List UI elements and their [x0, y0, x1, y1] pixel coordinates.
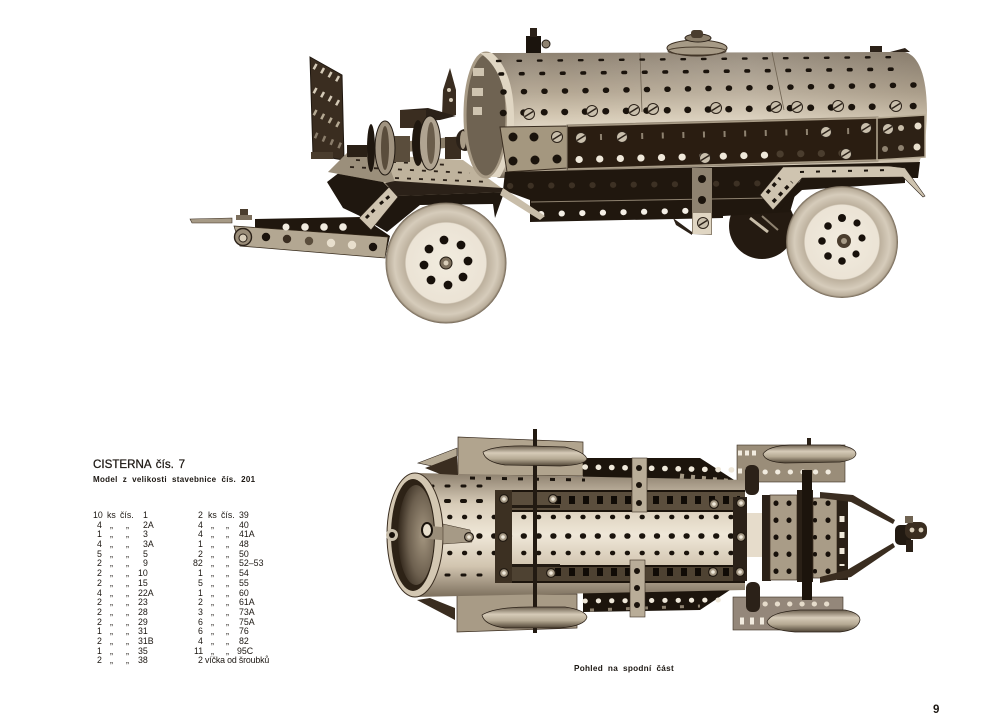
- left column of parts: 22A: [138, 588, 154, 598]
- illustration: underside view of trailer: [386, 429, 927, 633]
- left column of parts: „: [110, 578, 113, 588]
- left column of parts: 1: [97, 646, 102, 656]
- left column of parts: 1: [97, 529, 102, 539]
- left column of parts: 4: [97, 588, 102, 598]
- right column of parts: „: [211, 520, 214, 530]
- right column of parts: „: [211, 646, 214, 656]
- right column of parts: 54: [239, 568, 249, 578]
- left column of parts: „: [126, 568, 129, 578]
- left column of parts: 29: [138, 617, 148, 627]
- right column of parts: „: [211, 529, 214, 539]
- tank body with ring end: [465, 52, 927, 178]
- right column of parts: „: [211, 617, 214, 627]
- right column of parts: „: [211, 539, 214, 549]
- front axle: [512, 429, 560, 633]
- right end plate: [877, 115, 925, 160]
- right column of parts: 2: [198, 510, 203, 520]
- left column of parts: 1: [143, 510, 148, 520]
- winch pulleys: [367, 116, 474, 175]
- left column of parts: 2: [97, 617, 102, 627]
- winch axle: [347, 135, 474, 162]
- left column of parts: 28: [138, 607, 148, 617]
- left column of parts: 4: [97, 539, 102, 549]
- tan straps: [630, 458, 647, 617]
- right column of parts: „: [226, 578, 229, 588]
- right column of parts: ks: [208, 510, 217, 520]
- right corner bracket: [760, 166, 925, 210]
- left column of parts: „: [110, 617, 113, 627]
- left column of parts: „: [126, 539, 129, 549]
- left column of parts: 1: [97, 626, 102, 636]
- right column of parts: 2 víčka od šroubků: [198, 655, 269, 665]
- vertical strap: [673, 168, 712, 235]
- right column of parts: 82: [193, 558, 203, 568]
- left column of parts: ks: [107, 510, 116, 520]
- left column of parts: „: [126, 597, 129, 607]
- left column of parts: „: [126, 549, 129, 559]
- left column of parts: 10: [93, 510, 103, 520]
- left column of parts: čís.: [120, 510, 134, 520]
- right column of parts: „: [226, 558, 229, 568]
- right column of parts: 52–53: [239, 558, 264, 568]
- right column of parts: „: [211, 558, 214, 568]
- right column of parts: „: [211, 549, 214, 559]
- right column of parts: 4: [198, 529, 203, 539]
- rear wheel behind chassis: [729, 193, 795, 259]
- side frame beams: [583, 458, 745, 612]
- right column of parts: 48: [239, 539, 249, 549]
- right column of parts: 39: [239, 510, 249, 520]
- right column of parts: 61A: [239, 597, 255, 607]
- left column of parts: 2: [97, 636, 102, 646]
- left column of parts: 2: [97, 558, 102, 568]
- left column of parts: „: [126, 646, 129, 656]
- left column of parts: 2: [97, 607, 102, 617]
- right column of parts: [193, 510, 269, 665]
- left column of parts: „: [126, 588, 129, 598]
- caption: underside view: Pohled na spodní část: [574, 664, 674, 673]
- left column of parts: „: [110, 520, 113, 530]
- right column of parts: „: [226, 636, 229, 646]
- left column of parts: „: [126, 520, 129, 530]
- left column of parts: 3A: [143, 539, 154, 549]
- right column of parts: 73A: [239, 607, 255, 617]
- right column of parts: 50: [239, 549, 249, 559]
- right column of parts: 4: [198, 636, 203, 646]
- front axle wheels: [482, 446, 587, 628]
- left column of parts: 31B: [138, 636, 154, 646]
- right column of parts: „: [226, 617, 229, 627]
- left column of parts: „: [110, 636, 113, 646]
- left column of parts: 2: [97, 655, 102, 665]
- tank top valve: [526, 28, 550, 53]
- left column of parts: 2: [97, 597, 102, 607]
- left column of parts: „: [126, 626, 129, 636]
- tank underside: [405, 473, 745, 597]
- left column of parts: „: [110, 568, 113, 578]
- right column of parts: „: [211, 588, 214, 598]
- right column of parts: 75A: [239, 617, 255, 627]
- left column of parts: 9: [143, 558, 148, 568]
- right column of parts: „: [211, 636, 214, 646]
- left column of parts: „: [126, 617, 129, 627]
- right column of parts: „: [226, 529, 229, 539]
- platform plate: [328, 153, 507, 196]
- right column of parts: „: [226, 549, 229, 559]
- left column of parts: „: [126, 636, 129, 646]
- cross member and bolts: [495, 490, 747, 583]
- drawbar: [190, 209, 390, 258]
- left column of parts: „: [126, 529, 129, 539]
- right column of parts: 40: [239, 520, 249, 530]
- left column of parts: „: [110, 558, 113, 568]
- right column of parts: 41A: [239, 529, 255, 539]
- right column of parts: 1: [198, 588, 203, 598]
- rear axle plates: [733, 445, 845, 630]
- left column of parts: 5: [143, 549, 148, 559]
- right column of parts: čís.: [221, 510, 235, 520]
- left column of parts: 3: [143, 529, 148, 539]
- right column of parts: 2: [198, 597, 203, 607]
- left column of parts: „: [110, 607, 113, 617]
- left column of parts: „: [126, 578, 129, 588]
- right column of parts: „: [226, 539, 229, 549]
- right column of parts: „: [226, 588, 229, 598]
- right column of parts: „: [226, 607, 229, 617]
- right column of parts: 11: [194, 646, 203, 656]
- left column of parts: „: [110, 529, 113, 539]
- left column of parts: „: [110, 646, 113, 656]
- right column of parts: 1: [198, 539, 203, 549]
- vertical rear plate: [310, 57, 344, 160]
- left column of parts: „: [110, 626, 113, 636]
- left column of parts: „: [110, 549, 113, 559]
- right column of parts: 55: [239, 578, 249, 588]
- left column of parts: „: [126, 607, 129, 617]
- right column of parts: „: [211, 568, 214, 578]
- side panel and dark band: [500, 117, 878, 172]
- right column of parts: „: [211, 578, 214, 588]
- rear chassis plates: [745, 465, 848, 612]
- upright angle bracket: [400, 68, 456, 128]
- right column of parts: 5: [198, 578, 203, 588]
- right column of parts: „: [211, 607, 214, 617]
- front struts: [417, 448, 458, 620]
- left column of parts: 2: [97, 578, 102, 588]
- rear axle wheels: [763, 438, 860, 632]
- chassis dark frame under platform: [327, 172, 505, 232]
- left column of parts: 15: [138, 578, 148, 588]
- rear wheel: [786, 186, 898, 298]
- left column of parts: 38: [138, 655, 148, 665]
- subtitle: Model z velikosti stavebnice čís. 201: [93, 475, 256, 484]
- tank end cap: [386, 473, 473, 597]
- left column of parts: „: [110, 539, 113, 549]
- right column of parts: „: [211, 626, 214, 636]
- left column of parts: 2: [97, 568, 102, 578]
- parts list table: [93, 510, 269, 665]
- right column of parts: 95C: [237, 646, 254, 656]
- left column of parts: 31: [138, 626, 148, 636]
- left column of parts: „: [110, 655, 113, 665]
- right column of parts: „: [226, 626, 229, 636]
- right column of parts: 4: [198, 520, 203, 530]
- tank top pulley cap: [667, 30, 910, 56]
- left column of parts: 10: [138, 568, 148, 578]
- left column of parts: 4: [97, 520, 102, 530]
- slotted screws on tank: [524, 100, 902, 164]
- left column of parts: „: [110, 597, 113, 607]
- right column of parts: 76: [239, 626, 249, 636]
- right column of parts: 1: [198, 568, 203, 578]
- right column of parts: „: [226, 520, 229, 530]
- right column of parts: „: [226, 568, 229, 578]
- right column of parts: 3: [198, 607, 203, 617]
- tank perforation rows: [497, 57, 917, 113]
- lower chassis beam: [500, 162, 920, 222]
- front bracket plate: [359, 187, 398, 230]
- right column of parts: 6: [198, 626, 203, 636]
- right column of parts: 82: [239, 636, 249, 646]
- left column of parts: „: [126, 655, 129, 665]
- left column of parts: 35: [138, 646, 148, 656]
- tow hitch triangle: [820, 492, 927, 583]
- left column of parts: 5: [97, 549, 102, 559]
- right column of parts: „: [211, 597, 214, 607]
- page number: 9: [933, 704, 939, 716]
- left column of parts: „: [126, 558, 129, 568]
- front axle plates: [457, 437, 583, 632]
- right column of parts: 6: [198, 617, 203, 627]
- front wheel: [386, 202, 506, 324]
- left column of parts: 23: [138, 597, 148, 607]
- right column of parts: 2: [198, 549, 203, 559]
- left column of parts: [93, 510, 154, 665]
- illustration: side view of tanker trailer: [190, 28, 927, 324]
- longitudinal rails: [495, 490, 745, 583]
- right column of parts: „: [226, 646, 229, 656]
- title: CISTERNA čís. 7: [93, 458, 185, 471]
- right column of parts: 60: [239, 588, 249, 598]
- right column of parts: „: [226, 597, 229, 607]
- left column of parts: 2A: [143, 520, 154, 530]
- left column of parts: „: [110, 588, 113, 598]
